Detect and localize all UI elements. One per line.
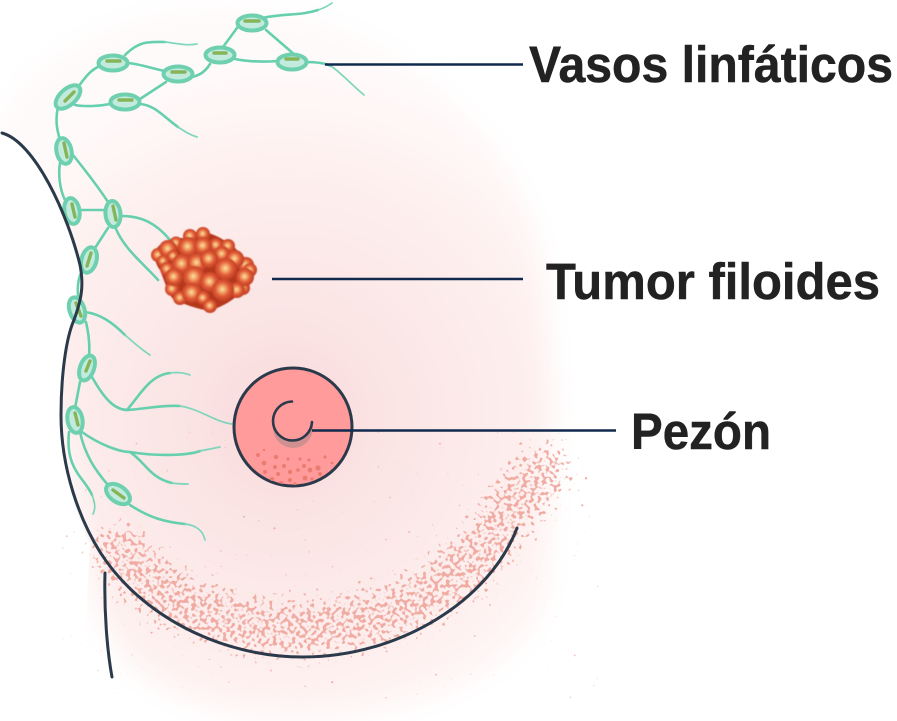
nipple shadow xyxy=(273,408,313,448)
leader line: vasos xyxy=(325,63,523,66)
tumor xyxy=(151,227,257,313)
areola stipple xyxy=(256,449,333,486)
stippled shading xyxy=(118,470,545,628)
leader line: tumor xyxy=(272,278,523,280)
vessel lines xyxy=(57,3,364,540)
pink breast glow xyxy=(54,92,551,712)
leader line: pezon xyxy=(312,429,616,432)
lymph nodes xyxy=(51,16,306,508)
label: tumor filoides: Tumor filoides xyxy=(546,253,880,310)
nipple xyxy=(234,368,352,486)
label: pezon: Pezón xyxy=(631,403,771,460)
nipple spiral xyxy=(273,402,312,440)
body contour xyxy=(2,133,517,677)
areola xyxy=(234,368,352,486)
lymphatic vessels xyxy=(51,3,364,540)
